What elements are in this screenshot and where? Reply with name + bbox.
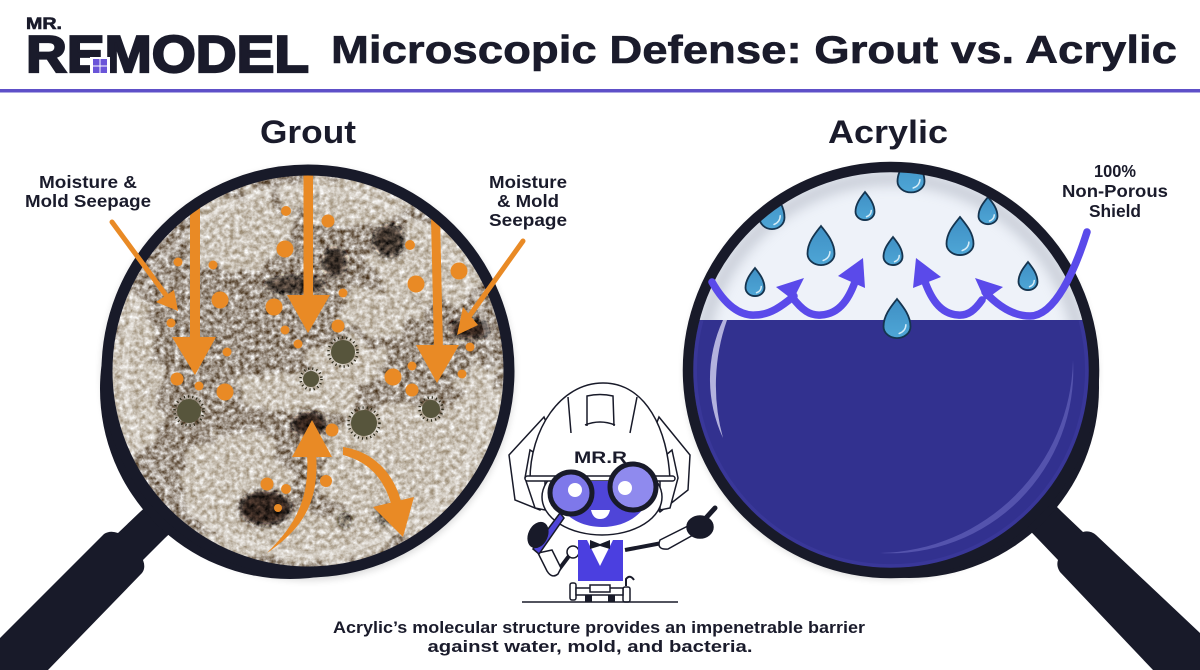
label: non-porous shield: Non-Porous <box>1062 181 1168 201</box>
mascot head <box>542 459 662 535</box>
mascot tool belt <box>570 577 634 602</box>
glass ring <box>125 188 491 554</box>
mascot ear muffs <box>525 450 678 510</box>
heading: Grout: Grout <box>260 114 356 150</box>
panel: acrylic magnifier <box>685 155 1200 670</box>
acrylic surface <box>690 155 1095 580</box>
deflection arrows <box>712 232 1087 316</box>
label: left seepage: Mold Seepage <box>25 191 151 211</box>
caption <box>333 618 865 656</box>
label: left seepage: Moisture & <box>39 172 137 192</box>
magnifier handle: acrylic <box>1010 485 1200 670</box>
mascot smile <box>591 510 610 519</box>
seepage arrows <box>172 170 459 553</box>
mascot face <box>553 481 652 527</box>
caption: Acrylic’s molecular structure provides an impenetrable barrier <box>333 618 865 637</box>
mascot badge text: MR.R <box>574 448 627 467</box>
mascot glasses <box>550 464 656 514</box>
logo: MR. <box>26 15 62 33</box>
label: non-porous shield: 100% <box>1094 161 1136 181</box>
mascot arms <box>524 508 715 576</box>
label: non-porous shield: Shield <box>1089 201 1141 221</box>
label: right seepage: Seepage <box>489 210 567 230</box>
label: non-porous shield <box>1062 161 1168 221</box>
panel: grout magnifier <box>0 168 515 670</box>
moisture droplets <box>166 206 474 512</box>
mascot bow tie <box>590 540 610 549</box>
arrow: right seepage <box>457 241 523 335</box>
stone grain overlay <box>105 170 515 575</box>
spore halos <box>174 338 442 438</box>
rim collar: grout <box>100 199 480 579</box>
water droplets <box>746 155 1038 338</box>
lens rim: grout <box>107 170 509 572</box>
label: right seepage: & Mold <box>497 191 559 211</box>
heading: Acrylic: Acrylic <box>828 114 948 150</box>
mascot ear flaps <box>509 417 570 510</box>
label: right seepage: Moisture <box>489 172 567 192</box>
mascot helmet <box>530 383 670 480</box>
mascot: Mr. R <box>509 383 715 602</box>
header rule <box>0 89 1200 92</box>
magnifier handle: grout <box>0 485 195 670</box>
label: right seepage <box>489 172 567 230</box>
label: left seepage <box>25 172 151 211</box>
rim collar: acrylic <box>719 198 1099 578</box>
grout microscopic texture <box>102 170 515 575</box>
title: Microscopic Defense: Grout vs. Acrylic <box>331 29 1177 72</box>
ground line <box>522 601 678 603</box>
mascot eyes <box>568 481 632 497</box>
caption: against water, mold, and bacteria. <box>428 637 752 656</box>
glass highlights <box>710 320 727 438</box>
arrow: left seepage <box>112 222 178 311</box>
lens rim: acrylic <box>688 167 1094 573</box>
mascot vest <box>578 540 623 581</box>
logo: REMODEL <box>26 26 309 84</box>
spore bodies <box>177 340 440 436</box>
mold spores <box>174 338 442 438</box>
